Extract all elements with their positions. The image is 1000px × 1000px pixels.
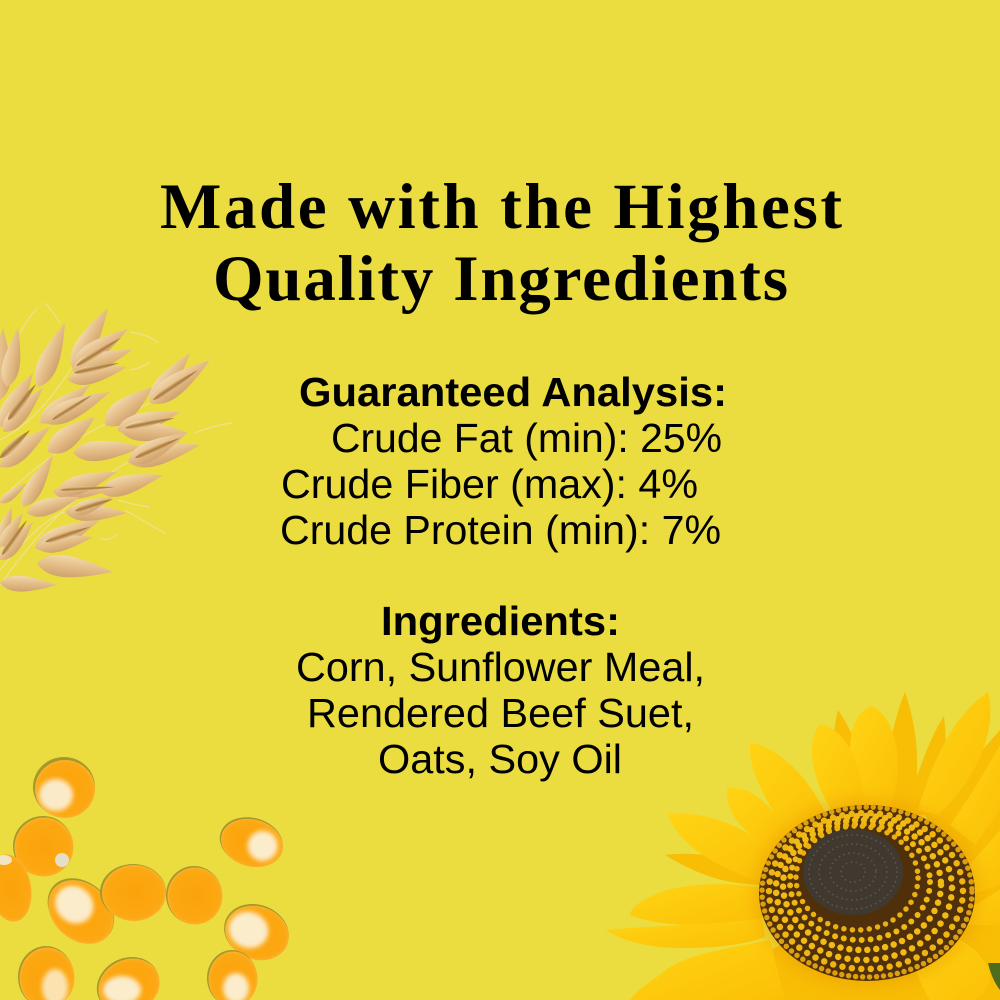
text block: guaranteed analysis: Crude Protein (min): 7% (280, 507, 721, 553)
kernel 1 (33, 757, 95, 818)
disc (759, 805, 975, 981)
front petals (605, 692, 1000, 1000)
kernel 10 (88, 947, 169, 1000)
icon: corn kernels (0, 757, 297, 1000)
green leaf (988, 963, 1000, 990)
text block: ingredients: Oats, Soy Oil (378, 736, 622, 782)
kernel 5 (100, 864, 166, 921)
title (160, 171, 842, 315)
kernel 11 (207, 950, 258, 1000)
back petals (630, 692, 1000, 1000)
text block: ingredients: Corn, Sunflower Meal, (296, 644, 705, 690)
text block: guaranteed analysis: Crude Fiber (max): 4% (281, 461, 698, 507)
kernel 9 (18, 946, 74, 1000)
text block: ingredients (296, 598, 705, 782)
text block: ingredients: Rendered Beef Suet, (307, 690, 694, 736)
icon: sunflower (605, 692, 1000, 1000)
title: Made with the Highest (160, 171, 842, 243)
petal base shading (753, 799, 981, 987)
kernel 6 (166, 866, 222, 924)
kernel 8 (216, 895, 297, 969)
text block: guaranteed analysis: Crude Fat (min): 25% (331, 415, 722, 461)
text block: guaranteed analysis (280, 369, 727, 553)
title: Quality Ingredients (213, 243, 788, 315)
text block: ingredients: Ingredients: (381, 598, 620, 644)
text block: guaranteed analysis: Guaranteed Analysis: (299, 369, 727, 415)
kernel 7 (214, 810, 289, 874)
kernel 2 (13, 816, 74, 876)
kernel 4 (34, 865, 127, 957)
icon: oat sprigs (0, 303, 232, 593)
kernel 3 (0, 851, 37, 925)
